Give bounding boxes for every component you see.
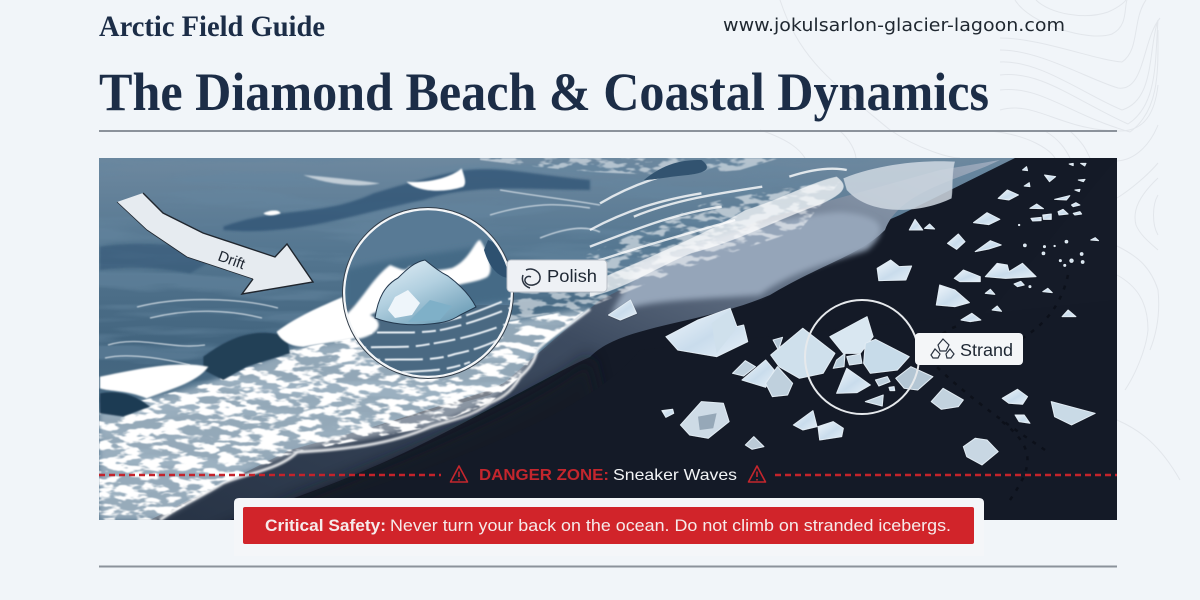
safety panel: Critical Safety: (265, 517, 386, 535)
icon: warning triangle right (748, 466, 766, 482)
icon: warning triangle left (450, 466, 468, 482)
site brand: Arctic Field Guide: Arctic Field Guide (99, 10, 325, 43)
magnified water (346, 210, 510, 305)
danger zone label: DANGER ZONE: (479, 467, 609, 484)
arrow: drift: Drift (216, 248, 248, 273)
danger zone label (450, 466, 766, 484)
footer rule (99, 566, 1117, 568)
breaking wave foam (100, 168, 465, 398)
foam average tint (99, 307, 590, 520)
dark wave lee faces (100, 333, 290, 417)
sand shadow (280, 352, 592, 498)
icon: spiral (522, 269, 540, 288)
footprints trail (930, 275, 1068, 500)
icon: polished iceberg (375, 260, 476, 325)
callout circle: strand (805, 300, 919, 414)
label: Strand (915, 333, 1023, 365)
foam wisps on open water (105, 190, 600, 365)
header rule (99, 130, 1117, 132)
danger zone label: Sneaker Waves (613, 467, 737, 484)
arrow: drift (117, 193, 313, 294)
critical safety banner (243, 507, 974, 544)
label: Strand: Strand (960, 340, 1013, 360)
label: Polish: Polish (547, 266, 597, 286)
label: Polish (507, 260, 607, 292)
danger zone dashed line (99, 474, 1117, 476)
splash foam (340, 240, 490, 340)
title: The Diamond Beach & Coastal Dynamics (99, 62, 989, 122)
beach dark sand base (150, 158, 1117, 520)
safety panel (234, 498, 984, 556)
panel: beach photo illustration (99, 158, 1117, 560)
ocean water (99, 158, 1015, 520)
shoreline foam edge (160, 309, 590, 520)
main shore foam band (590, 160, 955, 297)
callout circle: polish (340, 205, 520, 380)
wet sand strip (150, 160, 1000, 520)
safety panel: Never turn your back on the ocean. Do not climb on stranded icebergs. (390, 517, 951, 535)
topographic contour background (760, 0, 1180, 480)
lacy foam (99, 307, 590, 520)
icebergs on sand (608, 163, 1099, 465)
ring (344, 209, 512, 377)
dark wave swells (223, 169, 590, 231)
website URL: www.jokulsarlon-glacier-lagoon.com (723, 15, 1065, 36)
icon: stranded ice cubes (931, 339, 954, 358)
